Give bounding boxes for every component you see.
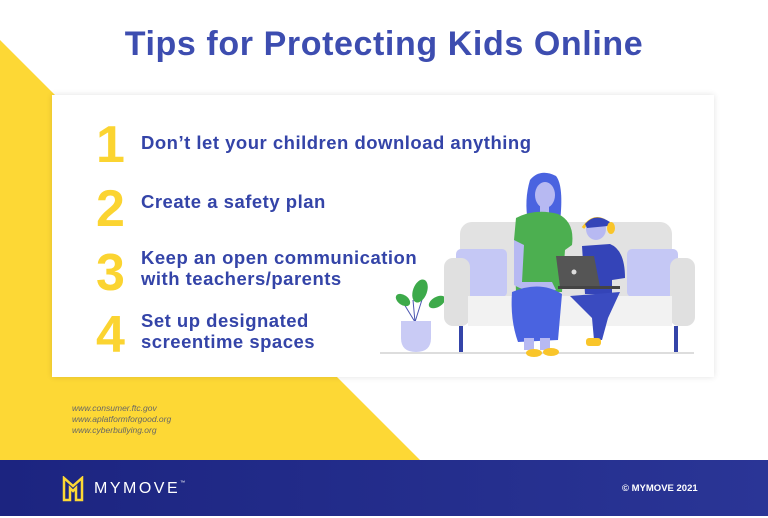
tip 3: 3	[96, 244, 125, 302]
tip 2: Create a safety plan	[141, 191, 326, 212]
tip 1	[96, 116, 532, 174]
tip 4	[96, 306, 315, 364]
sofa	[444, 222, 695, 352]
logo	[62, 476, 188, 502]
footer	[0, 460, 768, 516]
sources text: www.consumer.ftc.gov	[72, 403, 157, 413]
tip 3: Keep an open communication	[141, 247, 417, 268]
tip 4: Set up designated	[141, 310, 309, 331]
copyright: © MYMOVE 2021	[622, 483, 698, 494]
floor line	[380, 352, 694, 354]
child	[570, 217, 625, 346]
tip 2: 2	[96, 180, 125, 238]
icon: M logo	[62, 476, 84, 502]
logo: MYMOVE™	[94, 480, 188, 497]
laptop	[556, 256, 620, 289]
tip 4: 4	[96, 306, 125, 364]
panel: tips	[52, 95, 714, 377]
sources text: www.cyberbullying.org	[72, 425, 157, 435]
sources text	[72, 403, 172, 435]
tip 4: screentime spaces	[141, 331, 315, 352]
tip 2	[96, 180, 326, 238]
mother	[512, 173, 572, 357]
tip 1: Don’t let your children download anything	[141, 132, 532, 153]
tip 3: with teachers/parents	[141, 268, 342, 289]
icon: plant	[394, 277, 447, 352]
sources text: www.aplatformforgood.org	[72, 414, 171, 424]
tip 1: 1	[96, 116, 125, 174]
tip 3	[96, 244, 417, 302]
title: Tips for Protecting Kids Online	[125, 25, 643, 63]
